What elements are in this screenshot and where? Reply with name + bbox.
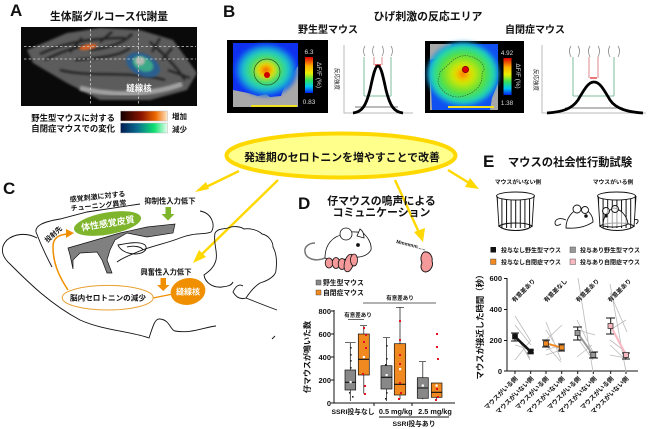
heatmap autism: ΔF/F (%)	[514, 63, 521, 89]
heatmap autism	[425, 41, 524, 113]
tuning curve wild type: 反応強度	[333, 68, 341, 90]
colour scale legend: 減少	[172, 124, 187, 134]
x tick labels: マウスがいる側	[545, 374, 582, 412]
panel: E social behaviour test	[475, 152, 640, 416]
significance labels: 有意差あり	[574, 277, 601, 304]
side labels: マウスがいない側	[495, 178, 541, 186]
axis title: マウスが接近した時間（秒）	[475, 271, 485, 379]
orange down arrow	[157, 278, 170, 291]
axis labels: 0	[327, 399, 331, 408]
y ticks: 600	[489, 274, 502, 283]
somatosensory cortex ellipse: 体性感覚皮質	[80, 213, 135, 233]
panel: C brain circuit diagram	[2, 179, 277, 339]
icon: calling pup	[396, 239, 433, 272]
icon: empty cage	[496, 192, 534, 230]
x labels: SSRI投与なし	[331, 407, 375, 416]
boxes	[345, 307, 442, 401]
axis labels	[302, 307, 331, 408]
label E: E	[483, 152, 494, 171]
orange projection arrow	[53, 234, 68, 290]
tuning curve wild type	[333, 45, 413, 113]
colour scale legend: 増加	[172, 111, 187, 121]
panel: D pup vocalization	[298, 194, 455, 428]
arrow to C top	[200, 171, 239, 190]
arrowhead C raphe	[193, 250, 206, 263]
legend E: 投与あり野生型マウス	[580, 246, 640, 254]
colour scale legend: 野生型マウスに対する	[31, 113, 115, 123]
heatmap autism: 4.92	[501, 50, 514, 57]
arrowhead C top	[195, 182, 209, 192]
significance marks	[348, 303, 436, 320]
box plot	[302, 294, 455, 428]
box plot: 有意差あり	[344, 311, 372, 319]
x labels: 0.5 mg/kg	[379, 407, 413, 416]
chart: time approaching	[475, 271, 638, 416]
legend E: 投与あり自閉症マウス	[580, 258, 640, 266]
axis labels: 400	[318, 353, 331, 362]
significance labels: 有意差なし	[542, 277, 569, 304]
x tick labels: マウスがいない側	[493, 374, 535, 416]
projection label: 投射先	[43, 224, 64, 244]
legend E: 投与なし野生型マウス	[501, 246, 561, 254]
raphe nucleus ellipse	[168, 275, 208, 308]
legend E: 投与なし自閉症マウス	[501, 258, 561, 266]
significance labels: 有意差あり	[606, 277, 633, 304]
significance labels: 有意差あり	[510, 277, 537, 304]
arrow to D	[395, 180, 421, 237]
colour scale legend	[31, 111, 187, 134]
label B: B	[223, 2, 235, 21]
x tick labels: マウスがいない側	[588, 374, 630, 416]
heatmap wild type	[227, 40, 328, 113]
connector serotonin to raphe	[153, 294, 173, 298]
axis labels: 200	[318, 376, 331, 385]
label C: C	[3, 179, 15, 198]
tuning label: チューニング異常	[70, 198, 127, 213]
central callout: 発達期のセロトニンを増やすことで改善	[244, 150, 440, 164]
axis labels: 仔マウスが鳴いた数	[302, 321, 312, 393]
icon: calling pup: Mmmmm......	[396, 239, 427, 252]
label D: D	[298, 194, 310, 213]
brain scan image	[21, 27, 197, 106]
central callout	[226, 134, 456, 178]
tuning label: 感覚刺激に対する	[69, 189, 126, 204]
title B: ひげ刺激の反応エリア	[374, 9, 483, 23]
heading autism: 自閉症マウス	[505, 23, 565, 36]
raphe nucleus ellipse: 縫線核	[176, 286, 200, 296]
significance labels	[510, 277, 633, 304]
heatmap autism: 1.38	[501, 100, 514, 107]
legend D: 野生型マウス	[323, 278, 364, 287]
panel: B whisker response area	[223, 2, 646, 113]
legend D: 自閉症マウス	[323, 288, 364, 297]
legend E	[490, 246, 640, 266]
x labels	[331, 407, 452, 428]
x tick labels: マウスがいる側	[513, 374, 550, 412]
heatmap wild type: 0.83	[303, 99, 316, 106]
x tick labels	[482, 374, 630, 416]
y ticks: 400	[489, 305, 502, 314]
means	[511, 318, 630, 359]
individual lines	[515, 278, 627, 372]
title D: コミュニケーション	[333, 206, 431, 219]
excitatory input label: 興奮性入力低下	[140, 268, 192, 276]
data points	[362, 320, 439, 401]
x labels: 2.5 mg/kg	[418, 407, 452, 416]
icon: mother mouse with pups	[305, 228, 371, 273]
x tick labels: マウスがいない側	[556, 374, 598, 416]
orange projection arrowhead	[66, 229, 74, 238]
icon: free mouse	[555, 205, 593, 228]
x labels: SSRI投与あり	[392, 419, 436, 428]
y ticks: 0	[498, 367, 502, 376]
heatmap wild type: 6.3	[304, 49, 314, 56]
corpus callosum shape	[68, 224, 175, 273]
side labels	[495, 178, 633, 186]
panel: A brain glucose metabolism	[10, 1, 197, 134]
arrow to C raphe	[198, 180, 278, 258]
y ticks: 200	[489, 336, 502, 345]
x tick labels: マウスがいない側	[524, 374, 566, 416]
serotonin reduction oval	[62, 285, 153, 310]
heatmap wild type: ΔF/F (%)	[315, 62, 322, 88]
x tick labels: マウスがいる側	[482, 374, 519, 412]
arrow to E	[448, 170, 474, 186]
mouse brain outline	[2, 204, 277, 339]
legend D	[316, 278, 364, 297]
box plot: 有意差あり	[386, 294, 414, 302]
title A: 生体脳グルコース代謝量	[50, 9, 168, 23]
arrowhead E	[465, 178, 479, 189]
tuning curve autism	[532, 45, 646, 113]
heading wild type: 野生型マウス	[298, 23, 358, 36]
axis labels: 600	[318, 330, 331, 339]
icon: cage with mouse	[598, 192, 638, 230]
title E: マウスの社会性行動試験	[508, 155, 633, 169]
colour scale legend: 自閉症マウスでの変化	[31, 124, 116, 134]
tuning label	[69, 189, 127, 213]
arrowhead D	[414, 228, 425, 242]
title D	[327, 194, 436, 219]
side labels: マウスがいる側	[593, 178, 633, 186]
y ticks	[489, 274, 502, 376]
inhibitory input label: 抑制性入力低下	[144, 196, 196, 206]
label A: A	[10, 1, 22, 20]
somatosensory cortex ellipse	[72, 207, 143, 240]
title D: 仔マウスの鳴声による	[327, 194, 436, 208]
brain scan image: 縫線核	[126, 83, 152, 93]
x tick labels: マウスがいる側	[578, 374, 615, 412]
tuning curve autism: 反応強度	[532, 69, 540, 91]
serotonin reduction oval: 脳内セロトニンの減少	[70, 292, 146, 302]
green down arrow	[162, 207, 174, 220]
axis labels: 800	[318, 307, 331, 316]
